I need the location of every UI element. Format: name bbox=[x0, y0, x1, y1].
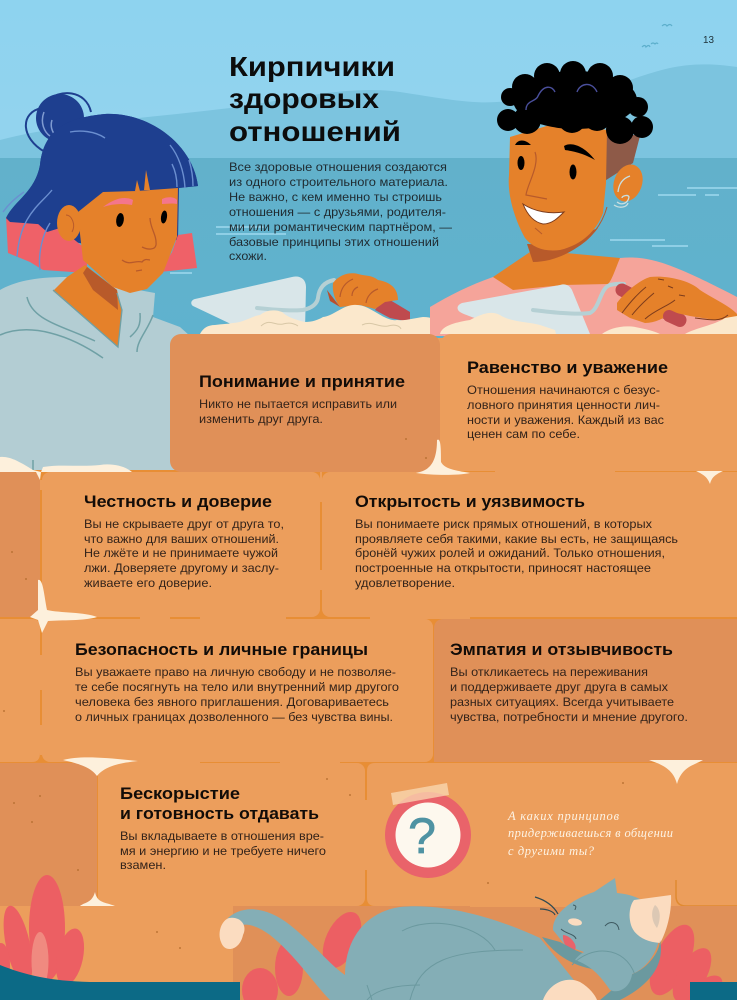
row 3 bricks bbox=[0, 619, 737, 762]
card: honesty: Честность и доверие bbox=[84, 493, 272, 511]
plants left bbox=[0, 875, 89, 990]
intro text: из одного строительного материала. bbox=[229, 175, 448, 189]
card: empathy: разных ситуациях. Всегда учитываете bbox=[450, 695, 674, 709]
row 2 bricks bbox=[0, 472, 737, 617]
title: здоровых bbox=[229, 83, 380, 114]
pink hair ends bbox=[6, 217, 197, 273]
card: honesty: лжи. Доверяете другому и заслу- bbox=[84, 561, 279, 575]
card: openness: удовлетворение. bbox=[355, 576, 455, 590]
card: equality: Равенство и уважение bbox=[467, 359, 668, 377]
back hair bbox=[6, 114, 198, 245]
card: understanding: изменить друг друга. bbox=[199, 412, 323, 426]
background: sky, mountains and sea bbox=[0, 0, 737, 338]
mortar heap bbox=[200, 305, 440, 334]
paw bbox=[575, 947, 632, 991]
handwritten question bbox=[507, 809, 673, 858]
intro text: отношения — с друзьями, родителя- bbox=[229, 205, 446, 219]
water strip bbox=[0, 965, 737, 1000]
mortar heap bbox=[440, 313, 737, 334]
card: empathy bbox=[450, 641, 688, 724]
neck bbox=[493, 250, 620, 290]
trowel bbox=[191, 273, 410, 330]
wet mortar splashes bbox=[0, 440, 723, 906]
card: openness: бронёй чужих ролей и ожиданий. Только отношения, bbox=[355, 546, 665, 560]
handwritten question: придерживаешься в общении bbox=[508, 826, 673, 840]
ear bbox=[57, 205, 81, 241]
head bbox=[553, 878, 660, 975]
card: selflessness: Бескорыстие bbox=[120, 785, 240, 803]
face bbox=[77, 186, 178, 293]
row 4 bricks bbox=[0, 763, 737, 906]
brick specks bbox=[3, 438, 624, 949]
card: honesty bbox=[84, 493, 284, 590]
card: selflessness: и готовность отдавать bbox=[120, 805, 319, 823]
row 1 right brick bbox=[441, 334, 737, 471]
card: understanding bbox=[199, 373, 405, 426]
mortar seam patches bbox=[40, 471, 615, 907]
intro text: Все здоровые отношения создаются bbox=[229, 160, 447, 174]
card: safety: человека без явного приглашения. Договариваетесь bbox=[75, 695, 389, 709]
card: empathy: Эмпатия и отзывчивость bbox=[450, 641, 673, 659]
card: openness: проявляете себя такими, какие вы есть, не защищаясь bbox=[355, 532, 678, 546]
intro text: Не важно, с кем именно ты строишь bbox=[229, 190, 442, 204]
trowel bbox=[458, 277, 737, 334]
birds bbox=[642, 24, 672, 47]
card: openness bbox=[355, 493, 678, 590]
intro text: базовые принципы этих отношений bbox=[229, 235, 439, 249]
title bbox=[229, 51, 401, 147]
card: equality: Отношения начинаются с безус- bbox=[467, 383, 660, 397]
bun bbox=[26, 93, 91, 152]
card: selflessness: взамен. bbox=[120, 858, 166, 872]
face features bbox=[515, 140, 531, 145]
card: safety: о личных границах дозволенного — без чувства вины. bbox=[75, 710, 393, 724]
card: honesty: что важно для ваших отношений. bbox=[84, 532, 279, 546]
card: empathy: и поддерживаете друг друга в самых bbox=[450, 680, 668, 694]
intro text bbox=[229, 160, 452, 263]
card: selflessness: мя и энергию и не требуете ничего bbox=[120, 844, 326, 858]
intro text: ми или романтическим партнёром, — bbox=[229, 220, 452, 234]
card: equality: ловного принятия ценности лич- bbox=[467, 398, 660, 412]
intro text: схожи. bbox=[229, 249, 267, 263]
card: safety bbox=[75, 641, 399, 724]
plants behind cat bbox=[242, 906, 728, 1000]
title: отношений bbox=[229, 116, 401, 147]
tail bbox=[226, 909, 385, 1000]
card: safety: Безопасность и личные границы bbox=[75, 641, 368, 659]
brick wall bbox=[0, 334, 737, 1000]
card: understanding: Никто не пытается исправить или bbox=[199, 397, 397, 411]
card: safety: те себе посягнуть на тело или внутренний мир другого bbox=[75, 680, 399, 694]
curly hair bbox=[497, 61, 653, 144]
icon: question badge bbox=[385, 783, 471, 878]
card: honesty: Вы не скрываете друг от друга то, bbox=[84, 517, 284, 531]
card: openness: Открытость и уязвимость bbox=[355, 493, 585, 511]
card: openness: Вы понимаете риск прямых отношений, в которых bbox=[355, 517, 652, 531]
card: honesty: Не лжёте и не принимаете чужой bbox=[84, 546, 278, 560]
face bbox=[509, 122, 607, 250]
card: empathy: чувства, потребности и мнение другого. bbox=[450, 710, 688, 724]
card: selflessness bbox=[120, 785, 326, 872]
front hair bbox=[6, 114, 198, 225]
card: honesty: живаете его доверие. bbox=[84, 576, 212, 590]
card: selflessness: Вы вкладываете в отношения вре- bbox=[120, 829, 324, 843]
ear and shaved side bbox=[603, 130, 640, 182]
body bbox=[345, 906, 590, 1000]
card: equality bbox=[467, 359, 668, 441]
icon: question badge: ? bbox=[408, 808, 436, 864]
hoodie bbox=[0, 277, 190, 472]
neck bbox=[53, 265, 122, 347]
page number: 13 bbox=[703, 34, 714, 46]
card: safety: Вы уважаете право на личную свободу и не позволяе- bbox=[75, 665, 396, 679]
card: understanding: Понимание и принятие bbox=[199, 373, 405, 391]
card: equality: ценен сам по себе. bbox=[467, 427, 580, 441]
row 5 bricks bbox=[0, 906, 737, 1000]
row 1 left brick bbox=[170, 334, 440, 472]
face features bbox=[103, 197, 177, 207]
illustration: girl with trowel bbox=[0, 93, 440, 472]
sweater bbox=[430, 257, 737, 336]
card: equality: ности и уважения. Каждый из вас bbox=[467, 413, 664, 427]
handwritten question: с другими ты? bbox=[508, 844, 595, 858]
illustration: boy with trowel bbox=[430, 61, 737, 336]
card: openness: построенные на открытости, приносят настоящее bbox=[355, 561, 651, 575]
card: empathy: Вы откликаетесь на переживания bbox=[450, 665, 648, 679]
handwritten question: А каких принципов bbox=[507, 809, 620, 823]
title: Кирпичики bbox=[229, 51, 395, 82]
cat bbox=[220, 878, 671, 1000]
